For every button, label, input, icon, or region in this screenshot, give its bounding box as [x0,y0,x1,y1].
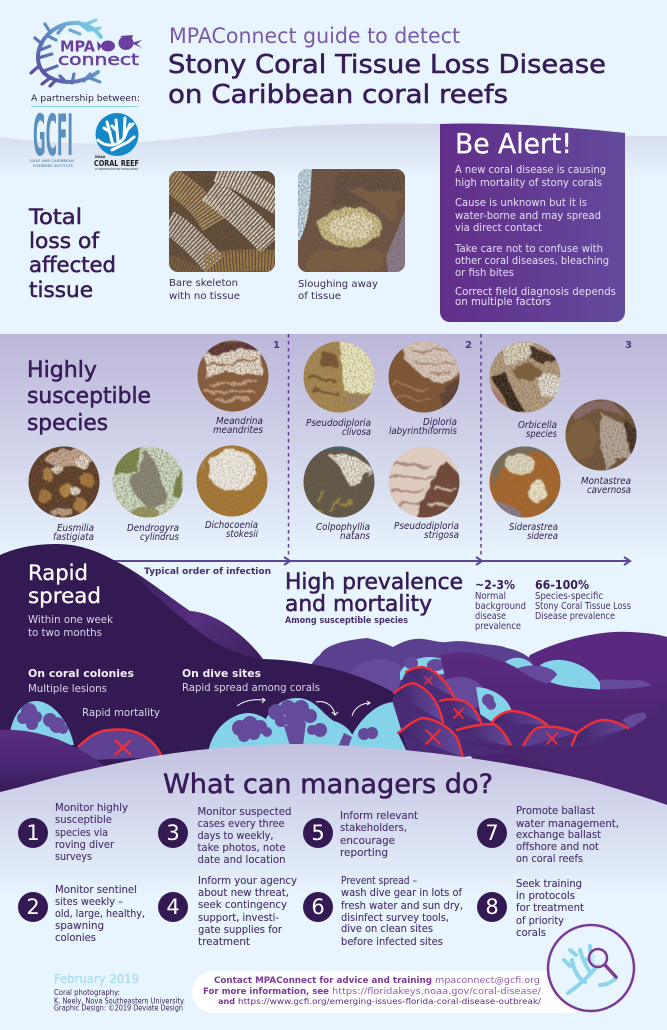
action 5 [303,809,419,859]
species photo: Montastrea cavernosa [565,399,637,471]
heading: total loss of affected tissue: tissue [29,278,93,302]
text: rapid mortality: Rapid mortality [82,707,160,719]
action 1: susceptible [55,813,112,826]
stat: background prevalence: disease [475,611,506,622]
action 3: 3 [166,821,180,845]
action 3: days to weekly, [198,829,274,842]
label: Meandrina meandrites [213,416,263,436]
logo: NOAA Coral Reef [94,113,139,171]
group numbers [273,340,632,351]
species photo: Pseudodiploria clivosa [303,340,376,413]
action 1: 1 [26,821,40,845]
action 4: treatment [198,935,251,948]
photo: sloughing tissue [298,169,405,272]
label: Diploria labyrinthiformis: labyrinthiformis [389,426,457,437]
logo: NOAA Coral Reef: CONSERVATION PROGRAM [95,167,138,171]
footer: contact pill: Contact MPAConnect for advice and training [214,976,432,986]
coral: lesion colony [78,729,162,760]
action 7: offshore and not [516,840,600,853]
text: rapid spread [28,561,114,639]
text: rapid spread: to two months [28,627,102,639]
heading: highly susceptible species: Highly [27,358,97,383]
heading: high prevalence and mortality: Among susceptible species [285,616,408,626]
action 4: gate supplies for [198,923,282,936]
action 2: spawning [55,919,104,932]
text: rapid spread: Rapid [28,561,88,585]
footer: contact pill [192,971,577,1013]
heading: high prevalence and mortality [285,570,463,626]
hill: right background [460,632,667,810]
heading: high prevalence and mortality: High prevalence [285,570,463,595]
label: Eusmilia fastigiata [53,523,94,543]
reef: foreground hill [463,700,667,810]
label: Diploria labyrinthiformis: Diploria [423,417,457,428]
species photo: Dichocoenia stokesii [196,445,268,517]
action 3: cases every three [198,817,285,830]
action 1: Monitor highly [55,801,128,814]
footer: contact pill: https://www.gcfi.org/emerging-issues-florida-coral-disease-outbreak/ [238,997,542,1006]
action 6: wash dive gear in lots of [341,886,463,899]
action 4: support, investi- [198,911,279,924]
action 2 [18,883,145,944]
label: Pseudodiploria clivosa: Pseudodiploria [306,418,371,429]
header wave band [0,124,667,180]
hill: mid layer [117,562,263,690]
panel: be alert: Take care not to confuse with [454,243,603,255]
text: on dive sites: Rapid spread among corals [182,682,320,694]
heading: highly susceptible species: species [27,411,108,436]
action 8: Seek training [516,877,582,890]
label: Eusmilia fastigiata: Eusmilia [57,523,94,534]
species photo: Colpophyllia natans [303,446,375,518]
footer: contact pill: For more information, see [203,987,329,997]
action 7: Promote ballast [516,804,596,817]
reef: small coral right [622,713,650,728]
hill: dark main [0,544,480,800]
heading: total loss of affected tissue: Total [28,205,82,229]
reef: mid hill [440,652,667,810]
logo: MPAConnect [31,20,142,86]
label: Siderastrea siderea [509,522,558,542]
heading: be alert: Be Alert! [455,127,572,160]
heading: total loss of affected tissue [28,205,116,302]
group numbers: 2 [465,340,472,351]
action 7: on coral reefs [516,852,583,865]
panel: be alert: on multiple factors [455,296,551,308]
action 8: of priority [516,914,564,927]
reef: diseased corals with lesions [392,667,628,757]
reef: blue coral behind lesions [476,687,512,725]
label: Dichocoenia stokesii [205,520,258,540]
action 6: Prevent spread – [341,874,417,887]
action 5: reporting [340,846,388,859]
caption: sloughing tissue: of tissue [298,291,341,302]
label: Dendrogyra cylindrus [127,523,179,543]
stat: species-specific prevalence: Species-specific [535,591,603,602]
icon: magnifier over coral [548,925,634,1011]
label: Orbicella species [518,420,557,440]
panel: be alert: other coral diseases, bleaching [455,255,609,267]
action 5: encourage [340,834,395,847]
label: Pseudodiploria strigosa [394,521,459,541]
species photo: Pseudodiploria strigosa [388,446,460,518]
action 8 [477,877,585,939]
action 1 [18,801,128,863]
label: Meandrina meandrites: meandrites [213,425,263,436]
action 8: corals [516,926,546,939]
title: MPAConnect guide to detect [169,24,460,48]
label: Montastrea cavernosa [581,476,631,496]
action 7: water management, [516,817,619,830]
text: rapid spread: spread [28,584,101,608]
text: on coral colonies: Multiple lesions [28,683,107,695]
footer: contact pill: https://floridakeys.noaa.gov/coral-disease/ [332,987,541,997]
label: Orbicella species: Orbicella [518,420,557,431]
order dividers [288,334,481,558]
footer: date and credits: K. Neely, Nova Southeastern University. [54,996,185,1006]
coral: left healthy colony [10,701,74,745]
species photo: Eusmilia fastigiata [28,446,100,518]
stat: background prevalence: Normal [475,591,506,602]
action 2: 2 [26,895,40,919]
label: Dichocoenia stokesii: Dichocoenia [205,520,258,531]
stat: species-specific prevalence [535,578,631,622]
panel: be alert [440,124,625,322]
logo: MPAConnect: connect [58,50,139,69]
partnership text: A partnership between: [31,94,140,104]
label: Colpophyllia natans: natans [340,531,370,542]
caption: bare skeleton: Bare skeleton [169,278,238,289]
stat: background prevalence: prevalence [475,621,521,632]
action 8: 8 [485,895,499,919]
footer: date and credits: Coral photography: [54,988,120,997]
panel background: what can managers do [0,744,667,900]
arrow: typical order of infection [100,557,630,565]
action 3: take photos, note [198,841,286,854]
label: Meandrina meandrites: Meandrina [216,416,263,427]
heading: highly susceptible species: susceptible [27,384,151,409]
label: Diploria labyrinthiformis [389,417,457,437]
stat: species-specific prevalence: Stony Coral Tissue Loss [535,601,631,612]
label: Montastrea cavernosa: Montastrea [581,476,631,487]
action 3: Monitor suspected [198,805,292,818]
action 2: Monitor sentinel [55,883,137,896]
logo: GCFI: FISHERIES INSTITUTE [33,164,73,168]
action 4: about new threat, [198,886,289,899]
action 3 [158,805,292,866]
stat: background prevalence: ~2-3% [475,578,515,592]
heading: total loss of affected tissue: affected [29,253,116,277]
label: Montastrea cavernosa: cavernosa [587,485,631,496]
species photo: Diploria labyrinthiformis [388,340,460,413]
label: typical order of infection: Typical order of infection [144,567,271,577]
text: GCFI [33,103,73,169]
action 1: surveys [55,850,92,863]
label: Dichocoenia stokesii: stokesii [226,529,258,540]
panel: be alert: water-borne and may spread [455,210,601,222]
panel: be alert: via direct contact [455,222,542,234]
panel: be alert: high mortality of stony corals [455,177,602,189]
action 5: Inform relevant [340,809,419,822]
reef: coral blob behind lesions [445,677,492,710]
icon: fish [97,35,142,52]
photo: bare skeleton [168,170,280,275]
label: Dendrogyra cylindrus: Dendrogyra [127,523,179,534]
action 1: roving diver [55,838,114,851]
stat: background prevalence: background [475,601,526,612]
action 1: species via [55,826,108,839]
action 7: 7 [485,821,499,845]
logo: GCFI: GULF AND CARIBBEAN [30,159,74,163]
panel: be alert: Correct field diagnosis depends [455,286,616,298]
stat: species-specific prevalence: Disease prevalence [535,611,615,622]
action 6 [303,874,463,948]
panel: be alert: A new coral disease is causing [455,164,606,176]
curved arrows: spread among corals [237,698,370,716]
action 4 [158,874,297,948]
title: Stony Coral Tissue Loss Disease [168,50,606,80]
footer: contact pill: and [218,997,235,1006]
footer: date and credits [54,971,185,1012]
hill: left foreground [0,730,107,795]
label: Dendrogyra cylindrus: cylindrus [140,532,179,543]
action 5: stakeholders, [340,821,407,834]
action 8: for treatment [516,901,585,914]
title [168,24,606,110]
label: Pseudodiploria clivosa: clivosa [342,427,371,438]
group numbers: 3 [625,340,632,351]
action 5: 5 [311,821,325,845]
label: Pseudodiploria strigosa: Pseudodiploria [394,521,459,532]
text: on coral colonies [28,668,134,695]
action 8: in protocols [516,889,575,902]
species photo: Siderastrea siderea [489,446,561,518]
label: Eusmilia fastigiata: fastigiata [53,532,94,543]
label: Orbicella species: species [526,429,557,440]
caption: bare skeleton [169,278,240,302]
logo: NOAA Coral Reef: NOAA [95,155,106,159]
action 7: exchange ballast [516,828,602,841]
action 3: date and location [198,853,286,866]
action 6: 6 [311,895,325,919]
caption: bare skeleton: with no tissue [169,291,240,302]
label: Colpophyllia natans [316,522,370,542]
text: on coral colonies: On coral colonies [28,668,134,680]
species photo: Dendrogyra cylindrus [112,446,184,519]
action 7 [477,804,619,865]
panel: be alert: Cause is unknown but it is [455,197,587,209]
footer: date and credits: Graphic Design: ©2019 Deviate Design [54,1004,183,1012]
text: on dive sites [182,668,320,694]
caption: sloughing tissue [298,279,378,302]
species photo: Meandrina meandrites [197,340,270,412]
action 6: fresh water and sun dry, [341,899,463,912]
heading: total loss of affected tissue: loss of [29,229,100,253]
action 6: dive on clean sites [341,922,433,935]
stat: background prevalence [475,578,526,632]
heading: what can managers do: What can managers do? [163,769,493,800]
label: Pseudodiploria strigosa: strigosa [424,530,459,541]
action 2: old, large, healthy, [55,907,145,920]
stat: species-specific prevalence: 66-100% [535,578,589,592]
action 4: 4 [166,895,180,919]
action 4: Inform your agency [198,874,297,887]
caption: sloughing tissue: Sloughing away [298,279,378,290]
action 6: before infected sites [341,935,443,948]
species photo: Orbicella species [488,341,562,413]
label: Siderastrea siderea: Siderastrea [509,522,558,533]
logo: MPAConnect: MPA [60,38,95,56]
panel background: susceptible species [0,334,667,562]
label: Pseudodiploria clivosa [306,418,371,438]
text: on dive sites: On dive sites [182,668,261,680]
label: Siderastrea siderea: siderea [527,531,558,542]
label: Colpophyllia natans: Colpophyllia [316,522,370,533]
panel: be alert: or fish bites [455,267,514,279]
action 2: sites weekly – [55,895,123,908]
logo: NOAA Coral Reef: CORAL REEF [94,159,139,168]
logo: GCFI [30,103,74,169]
heading: highly susceptible species [27,358,151,436]
group numbers: 1 [273,340,280,351]
footer: date and credits: February 2019 [54,971,139,986]
title: on Caribbean coral reefs [168,80,508,110]
reef: background corals [300,638,652,730]
action 4: seek contingency [198,898,287,911]
action 2: colonies [55,931,96,944]
text: rapid spread: Within one week [28,614,114,626]
heading: high prevalence and mortality: and mortality [285,592,432,617]
footer: contact pill: mpaconnect@gcfi.org [435,976,540,986]
action 6: disinfect survey tools, [341,911,449,924]
reef: blue corals on dive site [208,698,430,754]
